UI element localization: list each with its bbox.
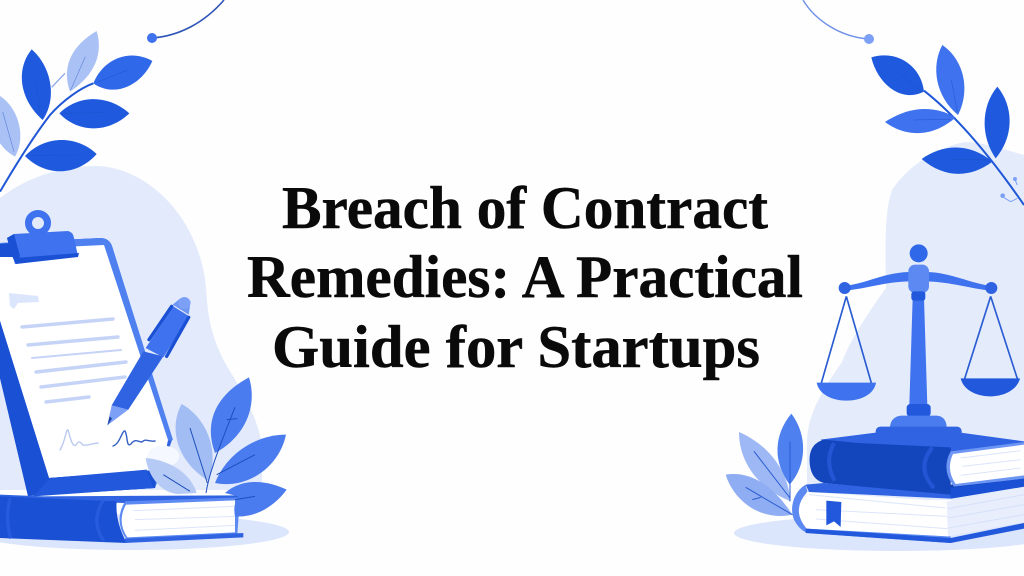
icon: leaf branch top left	[0, 31, 152, 192]
scale finial	[910, 244, 928, 262]
icon: leaf branch top right	[871, 45, 1024, 205]
decorative curve: top right	[803, 0, 874, 44]
lower book pages side	[947, 488, 1024, 536]
decorative curve: top left	[147, 0, 224, 43]
beam end right	[985, 282, 997, 294]
lower book cover	[806, 483, 951, 499]
signature marks	[60, 430, 155, 450]
icon: plant lower left	[146, 377, 287, 517]
bookmark	[826, 501, 841, 527]
text lines on paper	[22, 319, 126, 402]
paper stamp mark	[9, 293, 39, 309]
title: Guide for Startups	[272, 314, 760, 380]
title: Remedies: A Practical	[247, 244, 803, 310]
scale post	[909, 298, 927, 405]
icon: plant lower right	[726, 414, 803, 516]
ground shadow: left	[0, 514, 289, 550]
clipboard light edge	[0, 238, 173, 441]
icon: pen	[107, 297, 191, 425]
scale strings	[821, 296, 1017, 383]
scale beam	[845, 272, 991, 291]
scale pan right	[961, 378, 1020, 396]
icon: clipboard with signed contract	[0, 214, 173, 496]
background blob: left	[0, 166, 262, 490]
clipboard darker side	[0, 321, 155, 496]
top book pages	[946, 442, 1024, 487]
title: Breach of Contract	[282, 175, 768, 241]
top book spine	[810, 440, 1024, 496]
scale collar	[911, 291, 925, 301]
scale hub	[908, 265, 929, 293]
clipboard clip	[0, 231, 79, 264]
icon: scales of justice	[817, 244, 1020, 440]
scale pan left	[817, 383, 876, 401]
clipboard board	[0, 238, 172, 496]
background blob: right	[807, 142, 1024, 500]
lower book pages front	[799, 492, 948, 536]
beam end left	[839, 282, 851, 294]
contract paper	[0, 245, 168, 478]
top book cover	[821, 433, 1024, 451]
icon: book left	[0, 470, 243, 543]
icon: stacked books right	[792, 433, 1024, 543]
ground shadow: right	[734, 515, 1024, 551]
scale base	[876, 404, 962, 440]
clipboard clip ring	[28, 214, 48, 232]
title	[247, 175, 803, 380]
